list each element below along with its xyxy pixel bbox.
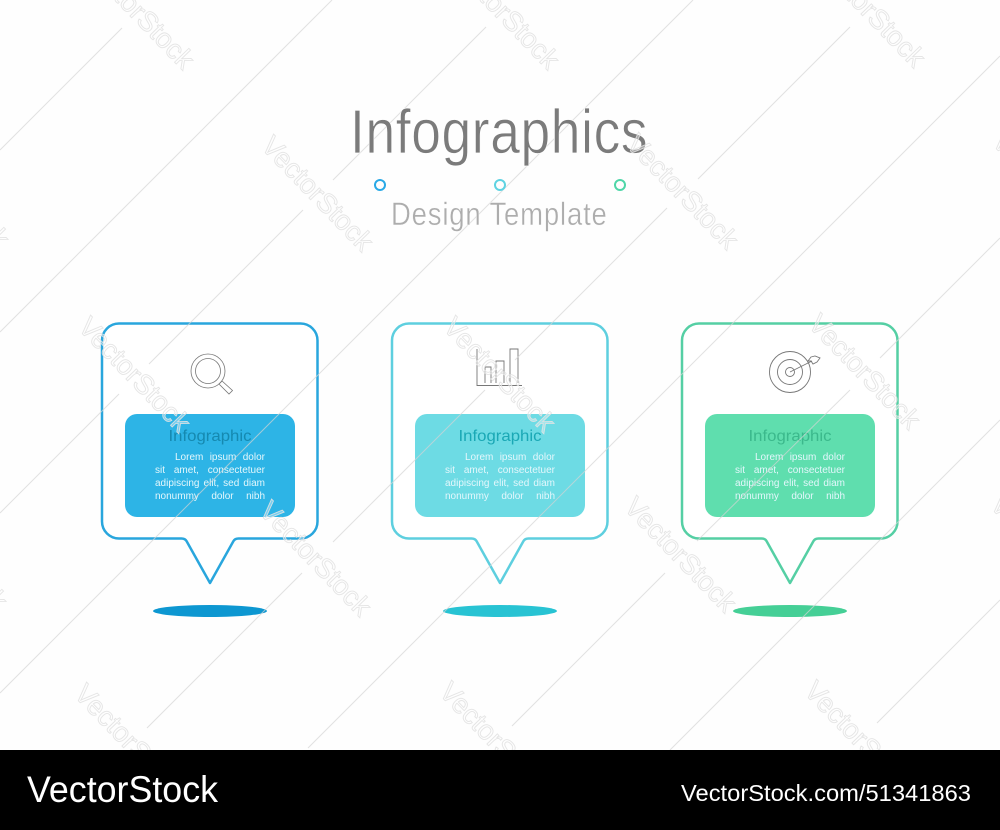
panel: magnifier card: nibh <box>246 491 265 502</box>
panel: magnifier card: dolor <box>211 491 234 502</box>
panel: magnifier card: consectetuer <box>208 465 265 476</box>
panel: magnifier card: elit, <box>204 478 219 489</box>
watermark overlay: VectorStock <box>73 311 197 438</box>
panel: bar chart card: dolor <box>501 491 524 502</box>
panel: bar chart card: amet, <box>464 465 489 476</box>
title: Infographics <box>350 98 648 167</box>
watermark overlay: VectorStock <box>619 491 743 618</box>
watermark overlay: VectorStock <box>69 678 193 805</box>
panel: target card: sit <box>735 465 745 476</box>
panel: bar chart card: elit, <box>494 478 509 489</box>
panel: bar chart card: nonummy <box>445 491 489 502</box>
panel: bar chart card: sed <box>513 478 529 489</box>
panel: bar chart card: dolor <box>533 452 555 463</box>
watermark overlay: VectorStock <box>621 128 745 255</box>
watermark overlay: VectorStock <box>256 130 380 257</box>
watermark overlay: VectorStock <box>434 676 558 803</box>
watermark overlay: VectorStock <box>803 308 927 435</box>
panel: bar chart card: adipiscing <box>445 478 489 489</box>
panel: target card: amet, <box>754 465 779 476</box>
panel: bar chart card: Infographic <box>458 428 542 445</box>
panel: target card: consectetuer <box>788 465 845 476</box>
footer image id: VectorStock.com/51341863 <box>681 780 971 806</box>
panel: magnifier card: sed <box>223 478 239 489</box>
panel: target card: nibh <box>826 491 845 502</box>
panel: bar chart card: diam <box>533 478 555 489</box>
panel: magnifier card: Lorem <box>175 452 203 463</box>
panel: bar chart card: nibh <box>536 491 555 502</box>
panel: bar chart card: consectetuer <box>498 465 555 476</box>
panel: magnifier card: adipiscing <box>155 478 199 489</box>
watermark overlay: VectorStock <box>438 311 562 438</box>
panel: target card: sed <box>803 478 819 489</box>
panel: magnifier card: sit <box>155 465 165 476</box>
panel: magnifier card: ipsum <box>210 452 236 463</box>
panel: target card: ipsum <box>790 452 816 463</box>
panel: magnifier card: diam <box>243 478 265 489</box>
panel: target card: dolor <box>791 491 814 502</box>
panel: target card: dolor <box>823 452 845 463</box>
panel: target card: nonummy <box>735 491 779 502</box>
footer logo: VectorStock <box>27 769 218 810</box>
watermark overlay: VectorStock <box>799 675 923 802</box>
panel: magnifier card: Infographic <box>168 428 252 445</box>
panel: target card: elit, <box>784 478 799 489</box>
panel: magnifier card: nonummy <box>155 491 199 502</box>
panel: target card: Infographic <box>748 428 832 445</box>
panel: target card: Lorem <box>755 452 783 463</box>
panel: magnifier card: dolor <box>243 452 265 463</box>
timeline dots <box>374 179 626 191</box>
panel: target card: adipiscing <box>735 478 779 489</box>
watermark overlay: VectorStock <box>254 495 378 622</box>
panel: bar chart card: ipsum <box>500 452 526 463</box>
panel: magnifier card: amet, <box>174 465 199 476</box>
panel: bar chart card: Lorem <box>465 452 493 463</box>
panel: target card: diam <box>823 478 845 489</box>
subtitle: Design Template <box>391 197 607 233</box>
panel: bar chart card: sit <box>445 465 455 476</box>
